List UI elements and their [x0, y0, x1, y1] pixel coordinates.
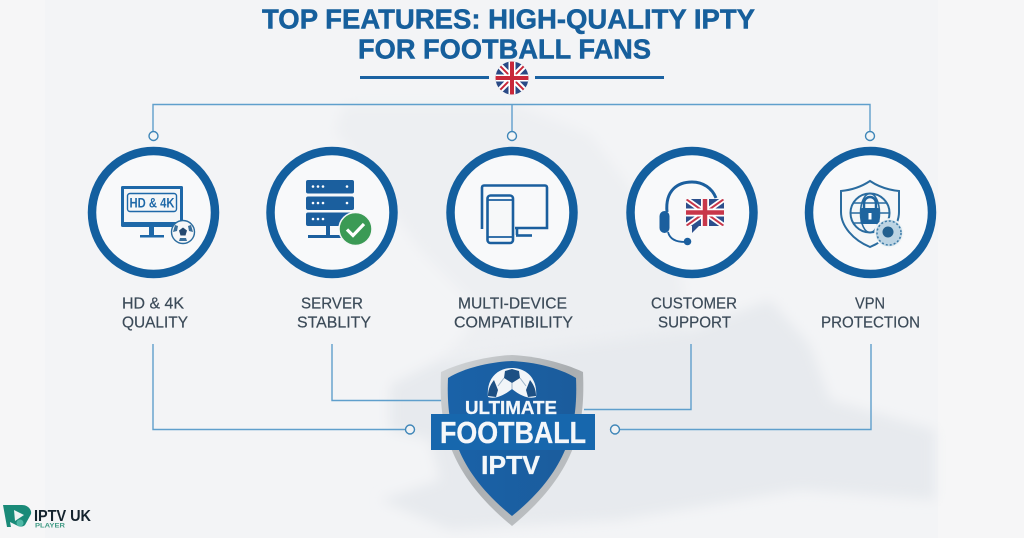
badge text: IPTV	[481, 450, 541, 480]
label: COMPATIBILITY	[454, 314, 573, 332]
title: FOR FOOTBALL FANS	[358, 34, 651, 64]
icon: shield with globe and lock	[841, 181, 903, 247]
label	[821, 296, 920, 332]
label: STABLITY	[297, 314, 371, 332]
label: MULTI-DEVICE	[458, 296, 567, 312]
label	[454, 296, 573, 332]
label: SUPPORT	[658, 314, 732, 332]
icon: monitor and phone	[482, 186, 547, 243]
panel: multi-device compatibility	[450, 151, 574, 332]
icon ring	[450, 151, 574, 274]
title: TOP FEATURES: HIGH-QUALITY IPTY	[262, 4, 755, 34]
label	[297, 296, 371, 332]
logo: IPTV UK Player: IPTV UK	[34, 508, 92, 525]
icon ring	[92, 151, 215, 274]
label: CUSTOMER	[651, 296, 737, 312]
logo: IPTV UK Player	[3, 505, 92, 530]
banner	[431, 414, 595, 450]
badge text	[440, 397, 586, 480]
icon ring	[630, 151, 754, 274]
badge text: ULTIMATE	[465, 397, 557, 418]
icon: monitor with football	[121, 186, 194, 244]
label: HD & 4K	[122, 296, 185, 312]
label: QUALITY	[122, 314, 188, 332]
logo: IPTV UK Player: PLAYER	[35, 524, 66, 530]
football	[488, 368, 536, 398]
bottom connector lines	[153, 344, 871, 434]
label: SERVER	[301, 296, 363, 312]
label	[122, 296, 188, 332]
title divider with UK flag	[360, 60, 664, 96]
icon: headset with UK flag speech bubble	[660, 182, 724, 245]
label: VPN	[855, 296, 885, 312]
label: PROTECTION	[821, 314, 920, 332]
panel: server stability	[270, 151, 394, 332]
shield frame	[441, 355, 583, 526]
badge text: FOOTBALL	[440, 416, 586, 450]
panel: VPN protection	[809, 151, 932, 332]
label	[651, 296, 737, 332]
icon: server rack with check	[306, 180, 372, 246]
icon ring	[270, 151, 394, 274]
shield body	[448, 361, 576, 516]
icon ring	[809, 151, 932, 274]
central shield badge	[431, 355, 595, 526]
title	[262, 4, 755, 64]
icon: monitor with football: HD & 4K	[130, 196, 175, 210]
logo mark	[3, 505, 31, 527]
top connector lines	[149, 104, 874, 140]
panel: HD and 4K quality	[92, 151, 215, 332]
panel: customer support	[630, 151, 754, 332]
